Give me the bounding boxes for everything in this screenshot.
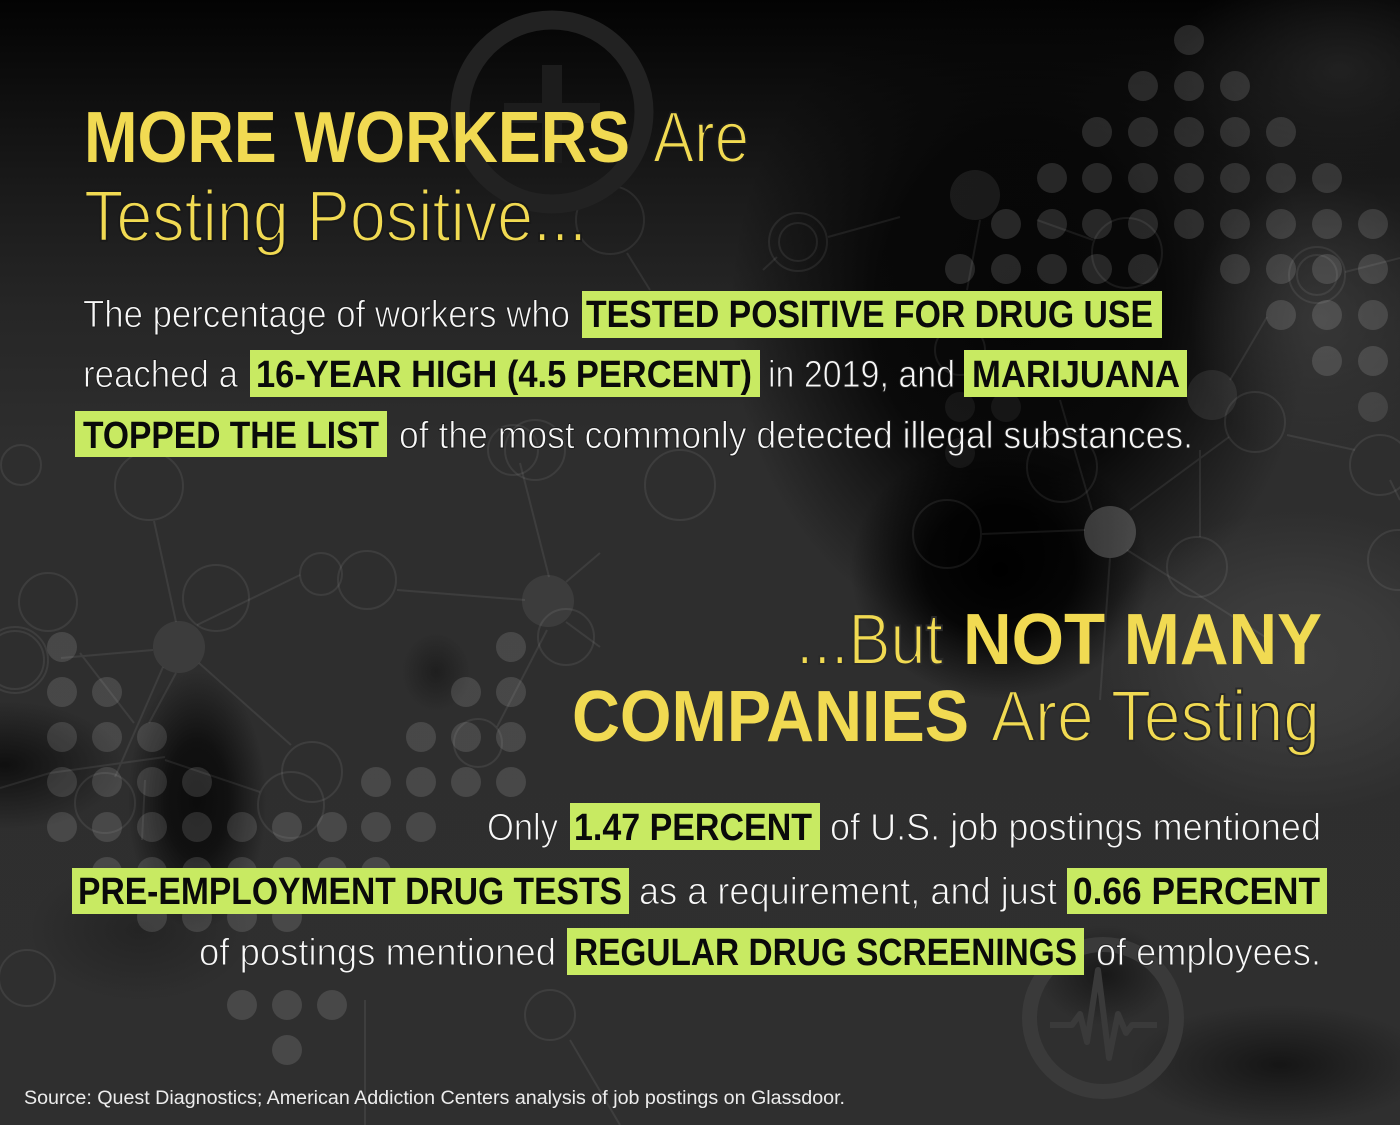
text block: job postings xyxy=(72,803,1327,975)
heading: but not many companies are testing: ...But xyxy=(796,600,943,680)
heading: but not many companies are testing: COMPANIES xyxy=(572,677,969,757)
text block: job postings: 1.47 PERCENT xyxy=(574,807,812,849)
text block: positive test rate: The percentage of workers who xyxy=(83,294,570,336)
molecule nodes xyxy=(153,170,1237,673)
heading: but not many companies are testing xyxy=(572,600,1322,757)
heading: but not many companies are testing: NOT MANY xyxy=(963,600,1322,680)
text block: job postings: of employees. xyxy=(1096,932,1321,974)
text block: positive test rate: reached a xyxy=(83,354,239,396)
heading: but not many companies are testing: Are Testing xyxy=(991,677,1320,757)
text block: positive test rate: 16-YEAR HIGH (4.5 PERCENT) xyxy=(256,354,752,396)
dot pattern: bottom left xyxy=(47,632,526,1065)
text block: positive test rate: MARIJUANA xyxy=(972,354,1180,396)
text block: positive test rate: in 2019, and xyxy=(768,354,955,396)
text block: positive test rate: TESTED POSITIVE FOR DRUG USE xyxy=(586,294,1153,336)
text block: positive test rate: TOPPED THE LIST xyxy=(83,415,379,457)
icon: plus in ring xyxy=(460,20,644,204)
text block: job postings: Only xyxy=(487,807,558,849)
text block: job postings: PRE-EMPLOYMENT DRUG TESTS xyxy=(78,871,622,913)
heading: more workers are testing positive: Are xyxy=(653,98,749,178)
dot pattern: top right xyxy=(945,25,1388,468)
text block: job postings: as a requirement, and just xyxy=(639,871,1057,913)
heading: more workers are testing positive: Testing Positive... xyxy=(84,177,587,257)
source note: Source: Quest Diagnostics; American Addiction Centers analysis of job postings on Glassdoor. xyxy=(24,1088,845,1109)
heading: more workers are testing positive xyxy=(84,98,749,257)
text block: job postings: 0.66 PERCENT xyxy=(1073,871,1320,913)
text block: job postings: REGULAR DRUG SCREENINGS xyxy=(574,932,1077,974)
text block: positive test rate: of the most commonly detected illegal substances. xyxy=(399,415,1193,457)
heading: more workers are testing positive: MORE WORKERS xyxy=(84,98,630,178)
text block: job postings: of postings mentioned xyxy=(199,932,556,974)
text block: positive test rate xyxy=(75,291,1193,457)
text block: job postings: of U.S. job postings mentioned xyxy=(830,807,1321,849)
icon: heartbeat in ring xyxy=(1030,944,1176,1092)
